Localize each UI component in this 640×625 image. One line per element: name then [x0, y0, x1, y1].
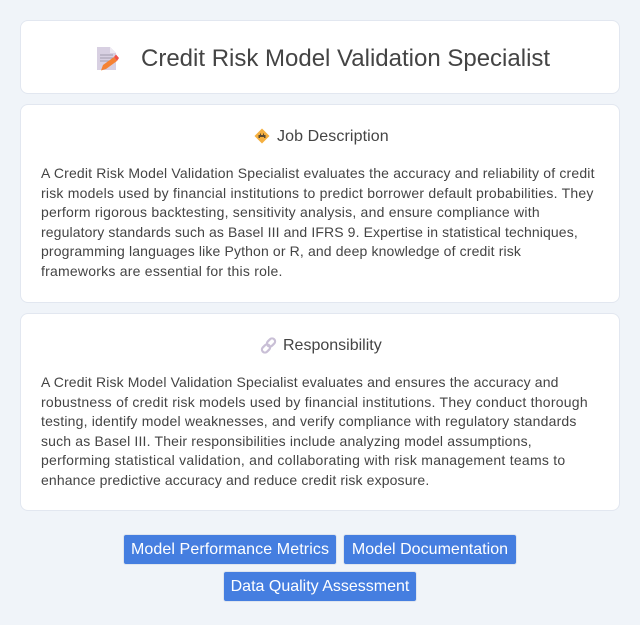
tag: model documentation	[343, 534, 517, 565]
text block: job description: programming languages like Python or R, and deep knowledge of credit risk	[41, 243, 521, 259]
text block: responsibility: enhance predictive accuracy and reduce credit risk exposure.	[41, 472, 429, 488]
tag: data quality assessment: Data Quality Assessment	[231, 578, 409, 595]
panel: job description	[20, 104, 620, 303]
text block: responsibility: performing statistical validation, and collaborating with risk management teams to	[41, 452, 565, 468]
tag: model documentation: Model Documentation	[352, 541, 508, 558]
text block: job description: regulatory standards such as Basel III and IFRS 9. Expertise in statistical techniques,	[41, 224, 578, 240]
text block: job description	[41, 165, 595, 279]
tag: model performance metrics: Model Performance Metrics	[131, 541, 329, 558]
text block: job description: risk models used by financial institutions to predict borrower default probabilities. They	[41, 185, 594, 201]
icon: chain link	[260, 337, 276, 354]
tag: model performance metrics	[123, 534, 337, 565]
tag: data quality assessment	[223, 571, 417, 602]
panel: title card	[20, 20, 620, 94]
icon: document with pencil	[97, 47, 119, 70]
text block: responsibility: such as Basel III. Their responsibilities include analyzing model assumptions,	[41, 433, 532, 449]
text block: responsibility: testing, identify model weaknesses, and verify compliance with regulatory standards	[41, 413, 577, 429]
heading: responsibility: Responsibility	[283, 337, 382, 354]
title: Credit Risk Model Validation Specialist	[141, 45, 550, 72]
icon: orange diamond	[254, 128, 270, 144]
text block: job description: perform rigorous backtesting, sensitivity analysis, and ensure compliance with	[41, 204, 540, 220]
text block: job description: frameworks are essential for this role.	[41, 263, 283, 279]
heading: job description: Job Description	[277, 128, 389, 145]
text block: job description: A Credit Risk Model Validation Specialist evaluates the accuracy and reliability of credit	[41, 165, 595, 181]
text block: responsibility: A Credit Risk Model Validation Specialist evaluates and ensures the accuracy and	[41, 374, 559, 390]
text block: responsibility	[41, 374, 588, 488]
panel: responsibility	[20, 313, 620, 511]
text block: responsibility: robustness of credit risk models used by financial institutions. They conduct thorough	[41, 394, 588, 410]
